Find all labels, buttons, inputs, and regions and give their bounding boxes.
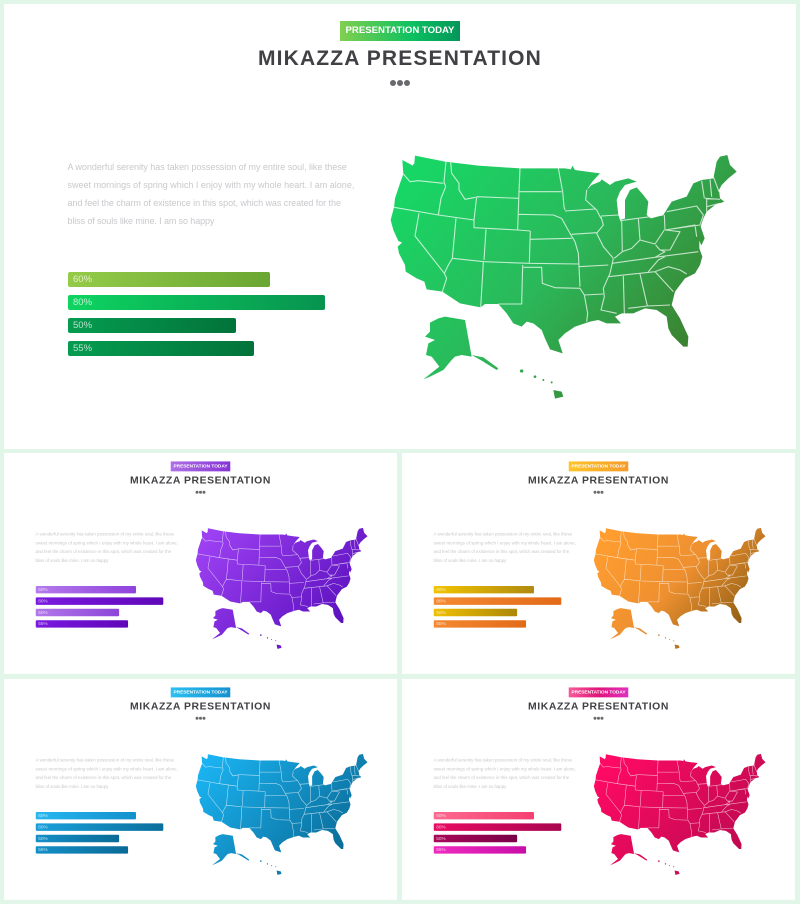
panel: blue slide [4, 679, 397, 900]
text block: and feel the charm of existence in this spot, which was created for the [433, 775, 569, 780]
badge [171, 461, 230, 471]
map [594, 528, 766, 649]
bar 60%: 60% [436, 587, 445, 592]
text block: sweet mornings of spring which I enjoy with my whole heart. I am alone, [68, 180, 354, 190]
text block [36, 531, 178, 563]
badge [568, 687, 628, 697]
bar 50% [433, 835, 517, 842]
bar 55%: 55% [38, 621, 48, 627]
panel: pink slide [402, 679, 795, 900]
text block: sweet mornings of spring which I enjoy with my whole heart. I am alone, [36, 766, 178, 771]
badge: PRESENTATION TODAY [173, 463, 228, 469]
bar 80%: 80% [38, 824, 48, 830]
title: MIKAZZA PRESENTATION [130, 474, 271, 486]
bar 50%: 50% [436, 836, 445, 841]
bar 60%: 60% [73, 274, 92, 285]
text block: bliss of souls like mine. I am so happy [36, 784, 108, 789]
bar 50% [433, 609, 517, 616]
bar 60%: 60% [38, 813, 48, 818]
bar chart [434, 812, 562, 854]
title: MIKAZZA PRESENTATION [258, 47, 542, 70]
bar 80%: 80% [436, 598, 445, 604]
dots [594, 490, 604, 494]
bar 80% [36, 823, 163, 831]
text block: A wonderful serenity has taken possession of my entire soul, like these [433, 757, 572, 762]
bar 50% [36, 609, 119, 616]
title: MIKAZZA PRESENTATION [130, 700, 271, 712]
panel: green slide [4, 4, 796, 449]
bar 80% [433, 597, 561, 605]
dots [390, 80, 410, 86]
bar 55% [433, 846, 525, 854]
bar chart [434, 586, 562, 628]
text block [433, 531, 576, 563]
text block: A wonderful serenity has taken possession of my entire soul, like these [36, 757, 174, 762]
bar 50%: 50% [38, 610, 48, 615]
bar 55% [68, 341, 254, 356]
bar 60%: 60% [38, 587, 48, 592]
bar 50% [68, 318, 236, 333]
bar 55%: 55% [73, 343, 92, 354]
map [390, 155, 737, 399]
text block: bliss of souls like mine. I am so happy [68, 216, 214, 226]
bar 60% [36, 812, 136, 819]
text block [68, 162, 354, 226]
bar 50%: 50% [73, 320, 92, 331]
text block: bliss of souls like mine. I am so happy [433, 558, 506, 563]
bar 55% [36, 846, 128, 854]
text block: sweet mornings of spring which I enjoy with my whole heart. I am alone, [433, 540, 575, 545]
text block: bliss of souls like mine. I am so happy [36, 558, 108, 563]
badge [568, 461, 628, 471]
bar 55% [433, 620, 525, 628]
text block: sweet mornings of spring which I enjoy with my whole heart. I am alone, [36, 540, 178, 545]
text block: bliss of souls like mine. I am so happy [433, 784, 506, 789]
bar 60% [68, 272, 270, 287]
badge: PRESENTATION TODAY [571, 689, 625, 695]
dots [196, 716, 206, 720]
text block: and feel the charm of existence in this spot, which was created for the [36, 549, 171, 554]
map [594, 754, 766, 875]
bar 50%: 50% [436, 610, 445, 615]
bar chart [36, 586, 164, 628]
text block: and feel the charm of existence in this spot, which was created for the [68, 198, 341, 208]
bar 80% [36, 597, 163, 605]
dots [196, 490, 206, 494]
map [196, 528, 368, 649]
text block: A wonderful serenity has taken possession of my entire soul, like these [68, 162, 347, 172]
bar 80% [433, 823, 561, 831]
bar 80%: 80% [436, 824, 445, 830]
bar 60%: 60% [436, 813, 445, 818]
bar 55%: 55% [38, 847, 48, 853]
panel: purple slide [4, 453, 397, 674]
bar 55% [36, 620, 128, 628]
badge: PRESENTATION TODAY [571, 463, 625, 469]
bar 60% [433, 812, 533, 819]
map [196, 754, 368, 875]
panel: orange slide [402, 453, 795, 674]
badge: PRESENTATION TODAY [346, 25, 454, 36]
bar chart [36, 812, 164, 854]
text block: sweet mornings of spring which I enjoy with my whole heart. I am alone, [433, 766, 575, 771]
badge [171, 687, 230, 697]
badge [340, 21, 460, 41]
bar 80%: 80% [73, 297, 92, 308]
bar 80%: 80% [38, 598, 48, 604]
text block: A wonderful serenity has taken possession of my entire soul, like these [36, 531, 174, 536]
title: MIKAZZA PRESENTATION [528, 474, 669, 486]
text block [36, 757, 178, 789]
title: MIKAZZA PRESENTATION [528, 700, 669, 712]
text block [433, 757, 576, 789]
bar 60% [433, 586, 533, 593]
bar 55%: 55% [436, 847, 445, 853]
bar 50%: 50% [38, 836, 48, 841]
bar 80% [68, 295, 324, 310]
bar 50% [36, 835, 119, 842]
dots [594, 716, 604, 720]
text block: and feel the charm of existence in this spot, which was created for the [36, 775, 171, 780]
text block: A wonderful serenity has taken possession of my entire soul, like these [433, 531, 572, 536]
bar 55%: 55% [436, 621, 445, 627]
badge: PRESENTATION TODAY [173, 689, 228, 695]
bar chart [68, 272, 325, 356]
bar 60% [36, 586, 136, 593]
text block: and feel the charm of existence in this spot, which was created for the [433, 549, 569, 554]
